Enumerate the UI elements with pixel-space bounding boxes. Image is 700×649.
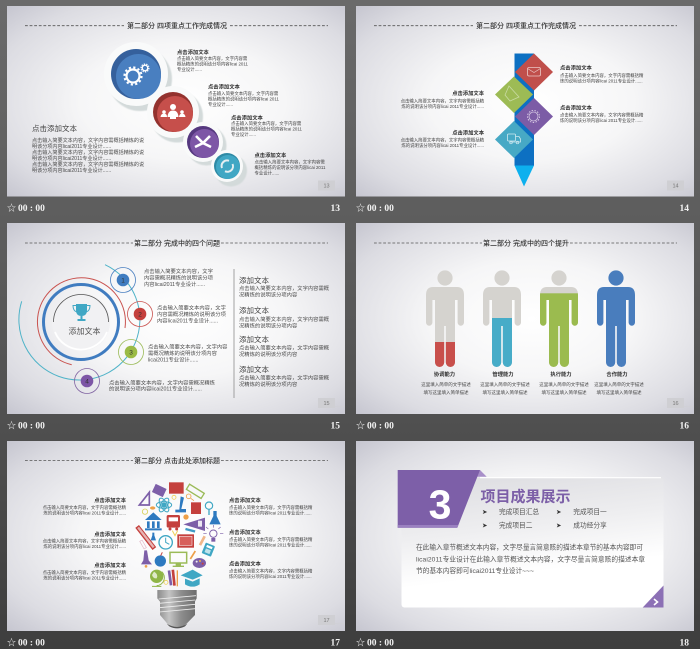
text block: item 3: 点击添加文本: [231, 114, 263, 122]
text block: right 2: 点击添加文本: [229, 528, 261, 536]
text block: right top: [560, 64, 644, 84]
text block: left 1: [43, 496, 127, 516]
footer: slide 13 timer and number: ☆: [7, 203, 16, 213]
text block: left summary: [32, 123, 144, 174]
text block: marker 1 note: 内容licai2011专业设计......: [144, 280, 205, 288]
footer: slide 14 timer and number: ☆: [356, 203, 365, 213]
text block: right bottom: 点击添加文本: [560, 104, 592, 112]
text block: 执行能力: 执行能力: [550, 370, 572, 378]
icon: teal refresh circle: [211, 150, 247, 186]
text block: 管理能力: [480, 370, 530, 396]
list: project items: ➤: [556, 509, 562, 516]
text block: left 3: 点击添加文本: [94, 561, 127, 569]
text block: item 4: 点击输入简要文本内容，文字内容需: [254, 158, 325, 166]
chart: concentric ring diagram: 添加文本: [68, 326, 100, 336]
text block: item 1: 专业设计......: [177, 66, 202, 73]
text block: 执行能力: 这里填入简单的文字描述: [539, 381, 589, 388]
text block: left 2: 点击添加文本: [94, 530, 127, 538]
footer: slide 13 timer and number: 00 : 00: [18, 204, 45, 214]
text block: left 1: 点击添加文本: [94, 496, 127, 504]
text block: item 2: 概括精炼的说明该分项内容licai 2011: [208, 96, 279, 102]
icon: green horn diamond: [495, 76, 533, 113]
text block: project description: [416, 542, 645, 575]
panel: slide 13: [7, 6, 345, 196]
text block: marker 4 note: [109, 378, 216, 392]
text block: item 3: 专业设计......: [231, 131, 256, 138]
text block: 合作能力: 这里填入简单的文字描述: [594, 381, 644, 388]
icon: red family circle: [147, 86, 203, 142]
icon: person blue 100 percent: [597, 270, 635, 367]
footer: slide 18 timer and number: 00 : 00: [367, 638, 394, 648]
icon: purple number flag: 3: [429, 482, 451, 528]
text block: right list 3: 况精炼的说明该分项内容: [239, 350, 298, 358]
text block: left summary: 明该分项内容licai2011专业设计......: [32, 155, 111, 162]
text block: left top: 炼的说明该分项内容licai 2011专业设计......: [401, 103, 484, 110]
text block: left 1: 炼的说明该分项内容licai 2011专业设计......: [43, 510, 126, 516]
text block: item 1: 概括精炼的说明该分项内容licai 2011: [177, 60, 248, 68]
text block: marker 3 note: [148, 342, 228, 364]
list: project items: 成功经分享: [573, 520, 607, 530]
text block: 执行能力: [539, 370, 589, 396]
footer: slide 17 timer and number: [7, 638, 340, 648]
footer: slide 16 timer and number: 16: [680, 422, 689, 432]
text block: right list 1: 添加文本: [239, 275, 269, 285]
text block: left summary: 点击输入简要文本内容，文字内容需概括精炼的说: [32, 137, 144, 144]
text block: marker 1 note: 内容需概况精炼的说明该分项: [144, 274, 214, 282]
icon: person red 25 percent: [425, 270, 465, 372]
text block: left 2: 炼的说明该分项内容licai 2011专业设计......: [43, 543, 126, 550]
footer: slide 18 timer and number: [356, 638, 689, 648]
text block: left bottom: 点击添加文本: [452, 128, 485, 136]
text block: item 4: 概括精炼的说明该分项内容licai 2011: [254, 164, 326, 171]
footer: slide 16 timer and number: [356, 420, 689, 432]
page number badge 14: 14: [672, 184, 679, 190]
footer: slide 17 timer and number: ☆: [7, 638, 16, 648]
page number badge 16: 16: [672, 401, 679, 407]
icon: corner triangle with chevron: [643, 586, 664, 608]
text block: right top: 炼的说明该分项内容licai 2011专业设计......: [560, 78, 643, 84]
text block: left 2: [43, 530, 127, 550]
text block: right 2: 点击输入简要文本内容，文字内容需概括精: [229, 536, 313, 543]
text block: item 4: [254, 151, 326, 176]
marker 3: 3: [129, 350, 133, 356]
list: project items: 完成项目二: [499, 520, 533, 530]
text block: left bottom: 点击输入简要文本内容，文字内容需概括精: [401, 136, 485, 144]
text block: right bottom: [560, 104, 644, 124]
heading: project results title: 项目成果展示: [480, 488, 571, 506]
text block: left 2: 点击输入简要文本内容，文字内容需概括精: [43, 538, 127, 544]
icon: purple gear diamond: [515, 98, 553, 135]
icon: large blue gear circle: [104, 42, 172, 111]
text block: 协调能力: [421, 370, 471, 396]
text block: marker 2 note: 点击输入简要文本内容，文字: [157, 304, 226, 312]
text block: marker 2 note: 内容需概况精炼的说明该分项: [157, 310, 227, 318]
text block: item 1: 点击添加文本: [177, 48, 209, 56]
card: project results: [398, 470, 664, 608]
heading: slide 16 title: 第二部分 完成中的四个提升: [483, 238, 569, 248]
text block: project description: 在此输入章节概述文本内容，文字尽量言简意赅的描述本章节的基本内容即可: [416, 542, 643, 552]
text block: right list 3: [239, 334, 330, 358]
text block: right top: 点击输入简要文本内容，文字内容需概括精: [560, 72, 644, 79]
footer: slide 17 timer and number: 00 : 00: [18, 638, 45, 648]
text block: right 1: 点击输入简要文本内容，文字内容需概括精: [229, 504, 313, 511]
text block: right list 4: 添加文本: [239, 364, 269, 374]
panel: slide 18: [356, 441, 694, 631]
text block: left top: [401, 89, 485, 110]
icon: red envelope diamond: [515, 54, 553, 90]
text block: 合作能力: 填写这里填入简单描述: [596, 389, 642, 396]
text block: right list 2: 况精炼的说明该分项内容: [239, 322, 298, 330]
text block: right list 1: 点击输入简要文本内容，文字内容需概: [239, 284, 330, 292]
page number badge 16: [667, 398, 694, 408]
icon: light bulb made of school icons: [135, 482, 223, 628]
text block: item 1: [177, 48, 248, 73]
text block: left summary: 点击输入简要文本内容，文字内容需概括精炼的说: [32, 149, 144, 156]
footer: slide 15 timer and number: ☆: [7, 420, 16, 430]
text block: marker 3 note: licai2011专业设计......: [148, 356, 199, 364]
text block: item 1: 点击输入简要文本内容，文字内容需: [177, 55, 248, 62]
text block: item 3: 点击输入简要文本内容，文字内容需: [231, 120, 302, 127]
footer: slide 13 timer and number: [7, 203, 340, 214]
text block: marker 1 note: 点击输入简要文本内容，文字: [144, 267, 213, 275]
footer: slide 17 timer and number: 17: [330, 638, 340, 648]
panel: slide 16: [356, 223, 694, 414]
footer: slide 18 timer and number: ☆: [356, 638, 365, 648]
text block: left bottom: [401, 128, 485, 149]
marker 4: 4: [85, 378, 89, 386]
panel: slide 15: [7, 223, 345, 414]
footer: slide 16 timer and number: 00 : 00: [367, 422, 394, 432]
panel: slide 14: [356, 6, 694, 196]
text block: right 3: 点击添加文本: [229, 560, 261, 568]
footer: slide 15 timer and number: 00 : 00: [18, 422, 45, 432]
text block: 合作能力: [594, 370, 644, 396]
icon: bulb screw base: [157, 590, 197, 628]
text block: 管理能力: 填写这里填入简单描述: [482, 389, 528, 396]
heading: slide 13 title: 第二部分 四项重点工作完成情况: [127, 21, 227, 30]
list: project items: 完成项目一: [573, 507, 607, 516]
text block: marker 2 note: 内容licai2011专业设计......: [157, 316, 218, 324]
text block: right list 3: 点击输入简要文本内容，文字内容需概: [239, 344, 330, 352]
text block: 合作能力: 合作能力: [606, 370, 628, 378]
footer: slide 14 timer and number: [356, 203, 689, 214]
text block: marker 3 note: 需概况精炼的说明该分项内容: [148, 349, 218, 357]
text block: left summary: 点击输入简要文本内容，文字内容需概括精炼的说: [32, 161, 144, 168]
page number badge 15: [318, 398, 345, 408]
page number badge 13: [318, 180, 345, 190]
list: project items: ➤: [482, 509, 488, 516]
chart: concentric ring diagram: [19, 265, 140, 380]
list: project items: [482, 507, 607, 530]
page number badge 13: 13: [323, 184, 330, 190]
page number badge 14: [667, 180, 694, 190]
text block: 执行能力: 填写这里填入简单描述: [542, 389, 587, 396]
text block: item 2: 专业设计......: [208, 101, 233, 108]
icon: trophy: [73, 304, 90, 321]
text block: project description: licai2011专业设计在此输入章节概述文本内容，文字尽量言简意赅的描述本章: [416, 554, 645, 564]
text block: marker 1 note: [144, 267, 214, 288]
text block: 协调能力: 这里填入简单的文字描述: [421, 381, 471, 388]
footer: slide 13 timer and number: 13: [330, 204, 340, 214]
text block: right 2: [229, 528, 313, 548]
icon: person green 75 percent: [540, 270, 578, 367]
text block: right list 4: 点击输入简要文本内容，文字内容需概: [239, 374, 330, 382]
icon: purple crossed tools circle: [183, 122, 226, 166]
icon: teal truck diamond: [495, 121, 533, 158]
footer: slide 14 timer and number: 00 : 00: [367, 204, 394, 214]
text block: right list 1: 况精炼的说明该分项内容: [239, 290, 298, 298]
icon: person teal 50 percent: [483, 270, 521, 372]
text block: right list 2: 添加文本: [239, 305, 269, 315]
text block: left 1: 点击输入简要文本内容，文字内容需概括精: [43, 504, 127, 511]
page number badge 15: 15: [323, 401, 330, 407]
text block: right 1: 点击添加文本: [229, 496, 261, 504]
chart: blue pillar with arrow: [514, 54, 534, 186]
text block: marker 3 note: 点击输入简要文本内容，文字内容: [148, 342, 228, 350]
icon: school items cluster: [135, 482, 223, 587]
text block: left 3: [43, 561, 127, 582]
list: project items: 完成项目汇总: [499, 507, 539, 516]
text block: item 2: 点击添加文本: [208, 82, 240, 90]
text block: left summary: 明该分项内容licai2011专业设计......: [32, 143, 111, 150]
text block: right 3: 炼的说明该分项内容licai 2011专业设计......: [229, 573, 312, 580]
text block: right bottom: 炼的说明该分项内容licai 2011专业设计......: [560, 117, 643, 124]
marker 3: [118, 340, 144, 364]
footer: slide 15 timer and number: [7, 420, 340, 432]
text block: right 3: [229, 560, 313, 580]
heading: slide 14 title: 第二部分 四项重点工作完成情况: [476, 21, 576, 30]
panel: slide 17: [7, 441, 345, 631]
text block: 管理能力: 管理能力: [492, 370, 514, 378]
text block: project description: 节的基本内容即可licai2011专业设计~~~: [416, 566, 534, 575]
text block: 管理能力: 这里填入简单的文字描述: [480, 381, 530, 388]
text block: item 2: [208, 82, 279, 108]
text block: right 1: 炼的说明该分项内容licai 2011专业设计......: [229, 510, 312, 516]
text block: item 3: 概括精炼的说明该分项内容licai 2011: [231, 126, 302, 132]
heading: slide 15 title: 第二部分 完成中的四个问题: [134, 238, 220, 248]
text block: left summary: 点击添加文本: [32, 123, 77, 133]
text block: right 2: 炼的说明该分项内容licai 2011专业设计......: [229, 542, 312, 548]
text block: right list 2: 点击输入简要文本内容，文字内容需概: [239, 315, 330, 323]
list: project items: ➤: [556, 522, 562, 530]
marker 1: [110, 268, 136, 292]
marker 1: 1: [121, 278, 125, 284]
text block: right list 3: 添加文本: [239, 334, 269, 344]
text block: right list 4: [239, 364, 330, 388]
heading: slide 17 title: 第二部分 点击此处添加标题: [134, 456, 220, 465]
text block: right 1: [229, 496, 313, 516]
footer: slide 16 timer and number: ☆: [356, 420, 365, 430]
text block: left top: 点击添加文本: [452, 89, 485, 97]
text block: item 3: [231, 114, 302, 138]
text block: marker 2 note: [157, 304, 227, 324]
page number badge 17: [318, 615, 345, 625]
icon: purple number flag: [398, 470, 487, 528]
text block: 协调能力: 协调能力: [434, 370, 455, 378]
text block: right list 4: 况精炼的说明该分项内容: [239, 380, 298, 388]
text block: left summary: 明该分项内容licai2011专业设计......: [32, 167, 111, 174]
text block: left bottom: 炼的说明该分项内容licai 2011专业设计......: [401, 142, 484, 149]
text block: left 3: 点击输入简要文本内容，文字内容需概括精: [43, 569, 127, 576]
text block: 协调能力: 填写这里填入简单描述: [424, 389, 469, 396]
marker 4: [74, 368, 100, 394]
text block: right list 2: [239, 305, 330, 330]
footer: slide 14 timer and number: 14: [680, 204, 689, 214]
text block: item 4: 专业设计......: [254, 170, 279, 176]
marker 2: [128, 302, 152, 326]
marker 2: 2: [138, 312, 142, 318]
text block: marker 4 note: 的说明该分项内容licai2011专业设计......: [109, 384, 202, 392]
footer: slide 15 timer and number: 15: [330, 422, 340, 432]
text block: item 4: 点击添加文本: [254, 151, 287, 159]
list: project items: ➤: [482, 522, 488, 530]
text block: right 3: 点击输入简要文本内容，文字内容需概括精: [229, 568, 313, 574]
footer: slide 18 timer and number: 18: [680, 638, 689, 648]
text block: marker 4 note: 点击输入简要文本内容，文字内容需概况精炼: [109, 378, 216, 386]
text block: left 3: 炼的说明该分项内容licai 2011专业设计......: [43, 574, 126, 582]
text block: right bottom: 点击输入简要文本内容，文字内容需概括精: [560, 112, 644, 118]
text block: item 2: 点击输入简要文本内容，文字内容需: [208, 90, 279, 97]
page number badge 17: 17: [323, 618, 330, 624]
text block: left top: 点击输入简要文本内容，文字内容需概括精: [401, 98, 485, 104]
text block: right top: 点击添加文本: [560, 64, 592, 72]
text block: right list 1: [239, 275, 330, 298]
